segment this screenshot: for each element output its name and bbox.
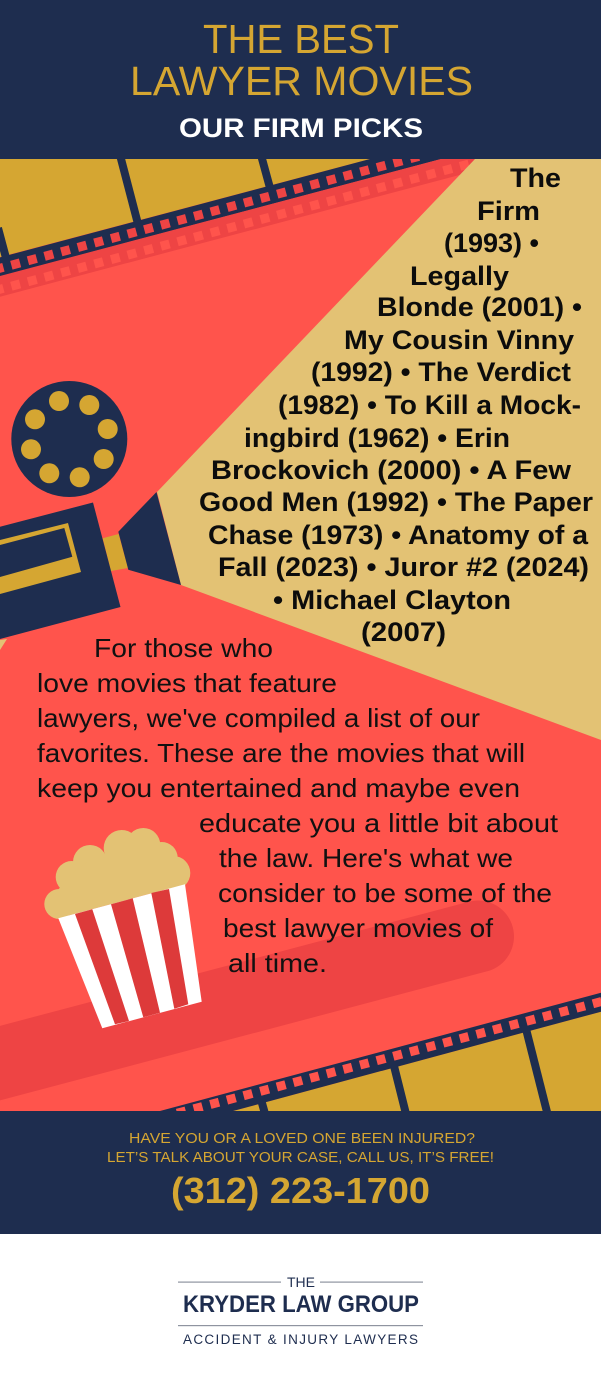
title <box>130 16 473 104</box>
text block: intro paragraph: consider to be some of the <box>218 878 552 908</box>
icon: popcorn <box>44 828 202 1028</box>
text block: movie list: (2007) <box>361 617 446 647</box>
text block: intro paragraph: all time. <box>228 948 327 978</box>
text block: intro paragraph: keep you entertained and maybe even <box>37 773 520 803</box>
phone number: (312) 223-1700 <box>171 1170 430 1211</box>
title: THE BEST <box>203 16 399 62</box>
text block: movie list <box>199 163 594 647</box>
text block: intro paragraph: love movies that feature <box>37 668 337 698</box>
subtitle: OUR FIRM PICKS <box>179 113 423 143</box>
panel: call to action footer <box>0 1111 601 1234</box>
text block: movie list: My Cousin Vinny <box>344 325 574 355</box>
text block: intro paragraph: lawyers, we've compiled a list of our <box>37 703 480 733</box>
call to action text <box>107 1131 494 1166</box>
text block: intro paragraph: best lawyer movies of <box>223 913 494 943</box>
text block: movie list: Chase (1973) • Anatomy of a <box>208 520 589 550</box>
text block: intro paragraph: the law. Here's what we <box>219 843 513 873</box>
text block: movie list: Good Men (1992) • The Paper <box>199 487 594 517</box>
logo: Kryder Law Group: THE <box>287 1274 315 1290</box>
text block: movie list: Blonde (2001) • <box>377 292 582 322</box>
projector light beam <box>0 159 601 740</box>
text block: movie list: (1993) • <box>444 228 539 258</box>
logo: Kryder Law Group: KRYDER LAW GROUP <box>183 1291 419 1318</box>
text block: movie list: Fall (2023) • Juror #2 (2024) <box>218 552 589 582</box>
call to action text: LET’S TALK ABOUT YOUR CASE, CALL US, IT’S FREE! <box>107 1150 494 1166</box>
text block: intro paragraph: For those who <box>94 633 273 663</box>
film strip: top <box>0 135 520 297</box>
text block: intro paragraph: favorites. These are the movies that will <box>37 738 525 768</box>
panel: header <box>0 0 601 159</box>
text block: movie list: (1982) • To Kill a Mock- <box>278 390 581 420</box>
text block: movie list: Legally <box>410 261 509 291</box>
decorative band behind popcorn <box>0 936 478 1079</box>
icon: projector camera <box>0 492 181 639</box>
title: LAWYER MOVIES <box>130 58 473 104</box>
text block: movie list: (1992) • The Verdict <box>311 357 571 387</box>
text block: intro paragraph <box>37 633 559 978</box>
text block: movie list: Brockovich (2000) • A Few <box>211 455 572 485</box>
text block: movie list: ingbird (1962) • Erin <box>244 423 510 453</box>
panel: red background <box>0 159 601 1111</box>
text block: intro paragraph: educate you a little bit about <box>199 808 559 838</box>
logo: Kryder Law Group: ACCIDENT & INJURY LAWYERS <box>183 1332 418 1347</box>
logo: Kryder Law Group <box>178 1274 423 1347</box>
icon: projector reel <box>11 381 127 497</box>
film strip: bottom <box>140 993 601 1123</box>
text block: movie list: The <box>510 163 561 193</box>
call to action text: HAVE YOU OR A LOVED ONE BEEN INJURED? <box>129 1131 475 1147</box>
text block: movie list: • Michael Clayton <box>273 585 511 615</box>
text block: movie list: Firm <box>477 196 540 226</box>
